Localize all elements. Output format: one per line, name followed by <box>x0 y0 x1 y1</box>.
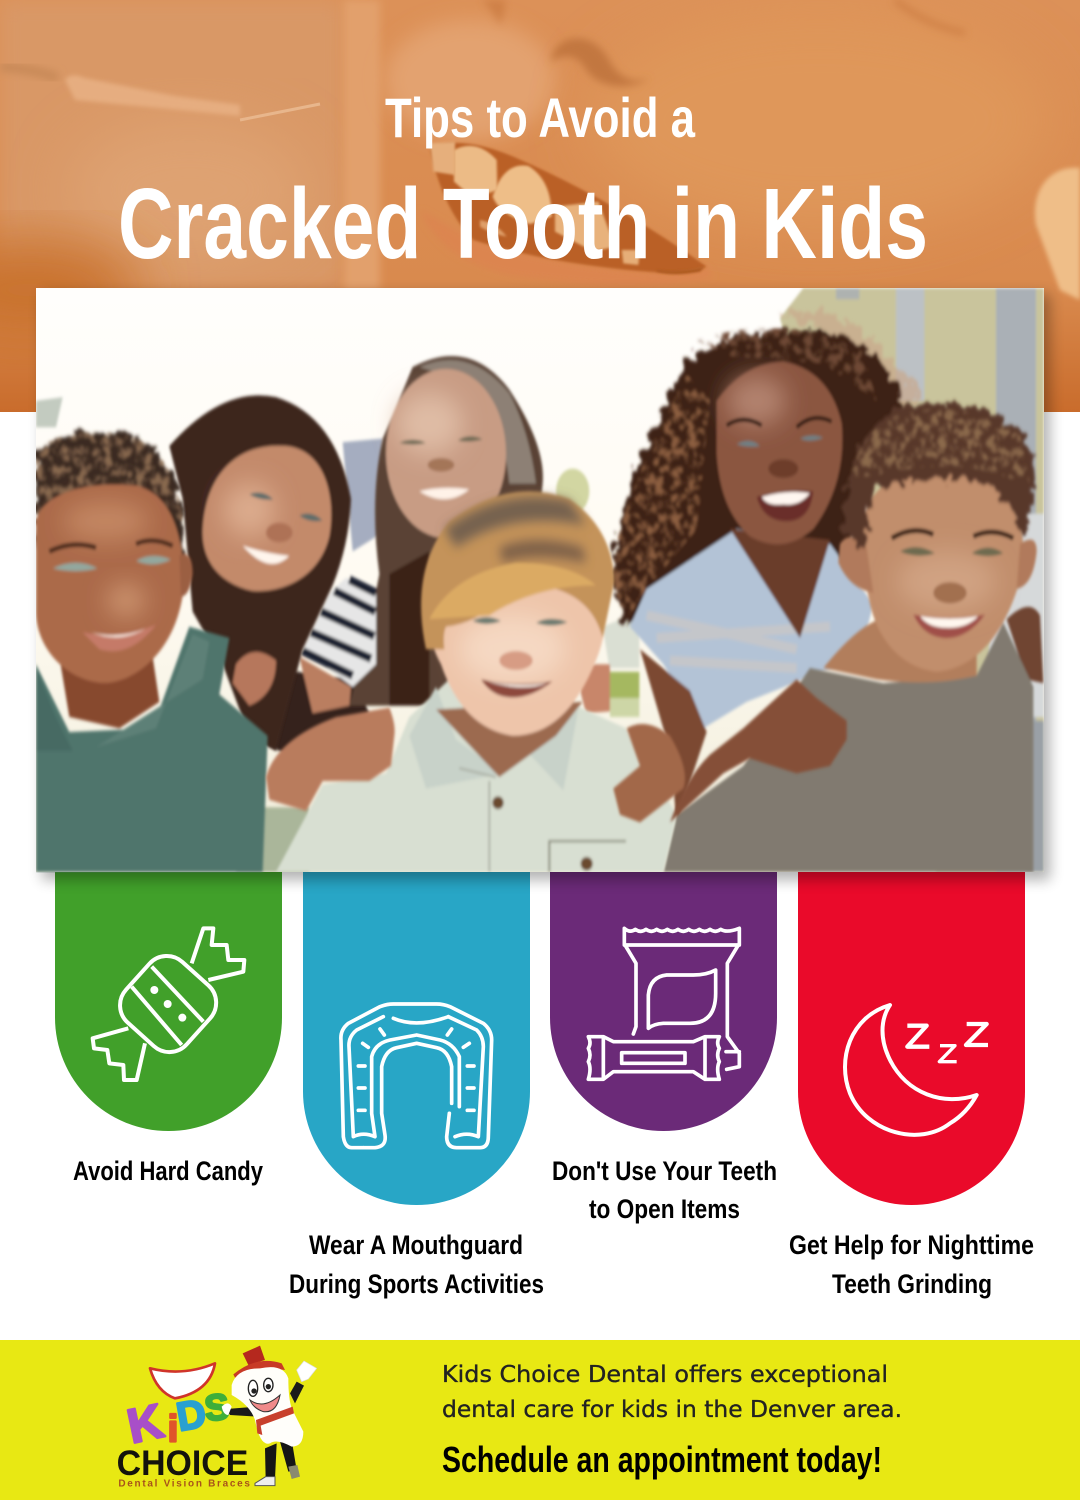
logo word CHOICE: CHOICE <box>117 1444 248 1483</box>
curly-haired girl's hands <box>613 679 847 822</box>
caption: grinding: Teeth Grinding <box>832 1269 992 1299</box>
caption: grinding: Get Help for Nighttime <box>789 1230 1034 1260</box>
icon: candy <box>93 928 244 1080</box>
tip card: red moon <box>798 860 1025 1205</box>
icon: mouthguard <box>341 1004 492 1148</box>
logo word Kids: D <box>173 1392 209 1440</box>
logo: Kids Choice Dental <box>117 1346 317 1490</box>
caption: open items: to Open Items <box>589 1194 740 1224</box>
title: Tips to Avoid a: Tips to Avoid a <box>385 86 696 149</box>
boy in grey t-shirt <box>663 403 1043 872</box>
footer text: dental care for kids in the Denver area. <box>442 1397 902 1423</box>
tip card: green candy <box>55 860 282 1131</box>
footer text: Kids Choice Dental offers exceptional <box>442 1362 888 1388</box>
photo: six smiling children <box>36 288 1044 872</box>
logo word Kids: K <box>123 1394 168 1454</box>
blond boy in pale shirt <box>276 491 677 872</box>
icon: moon and zzz <box>845 1005 988 1135</box>
logo tagline: Dental Vision Braces <box>118 1479 250 1490</box>
mouth <box>430 142 706 276</box>
background photo: orange tinted smile <box>0 0 1080 412</box>
arm across blond boy's shoulder <box>266 708 395 811</box>
building at right <box>36 288 1044 872</box>
tip card: blue mouthguard <box>303 860 530 1205</box>
caption: mouthguard <box>289 1230 544 1299</box>
footer band <box>0 1340 1080 1500</box>
caption: grinding <box>789 1230 1034 1299</box>
caption: Avoid Hard Candy: Avoid Hard Candy <box>73 1156 263 1186</box>
logo mouth <box>150 1363 215 1398</box>
girl with long dark hair <box>169 395 351 751</box>
footer text <box>442 1362 902 1423</box>
nose <box>551 38 650 86</box>
logo word Kids: i <box>168 1408 178 1451</box>
logo tooth mascot <box>222 1346 317 1486</box>
logo word Kids <box>123 1386 231 1454</box>
boy in teal hoodie <box>36 431 268 872</box>
caption: mouthguard: Wear A Mouthguard <box>309 1230 523 1260</box>
logo word Kids: S <box>203 1386 231 1429</box>
tip card: purple snack wrappers <box>550 860 777 1131</box>
photo shadow <box>42 294 1050 880</box>
girl in striped shirt <box>243 356 543 762</box>
girl with curly hair <box>613 311 923 822</box>
caption: mouthguard: During Sports Activities <box>289 1269 544 1299</box>
icon: snack packets <box>588 928 739 1079</box>
caption: open items: Don't Use Your Teeth <box>552 1156 777 1186</box>
call to action: Schedule an appointment today! <box>442 1439 882 1480</box>
caption: open items <box>552 1156 777 1224</box>
